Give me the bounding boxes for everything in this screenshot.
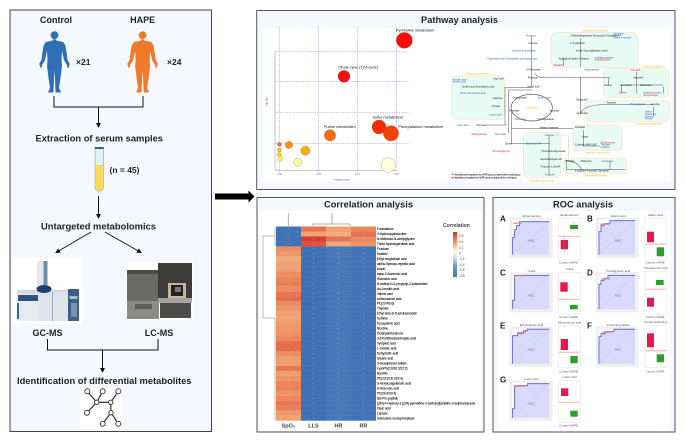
- chart: metabolic pathway map: Hypoxanthine: [584, 68, 600, 71]
- metabolite row labels: Ambroxanoic acid: [377, 297, 402, 301]
- chart: metabolic pathway map: Deoxyuridine: [643, 94, 658, 97]
- chart: metabolic pathway map: 3-PGlycerate: [526, 69, 541, 72]
- chart group F: F: [587, 322, 592, 330]
- legend: correlation scale: -0.6: [459, 268, 465, 272]
- metabolite row labels: 3-Hexylphenol sulfate: [377, 361, 407, 366]
- chart: metabolic pathway map: Glutamine: [577, 112, 589, 115]
- metabolite row labels: Formaldone: [377, 227, 394, 231]
- chart: metabolic pathway map: Linoleic acid Arachidonic acid: [462, 85, 495, 88]
- chart group C: Uracil: [566, 267, 574, 271]
- chart: metabolic pathway map: Carnitine: [493, 97, 503, 100]
- chart group G: Control: [559, 424, 569, 428]
- chart group G: [500, 375, 581, 428]
- pathway legend: [451, 172, 522, 180]
- chart group E: E: [500, 322, 506, 330]
- chart group C: C: [500, 268, 506, 278]
- metabolite row labels: Lactose: [377, 411, 388, 415]
- pathway connections: [487, 37, 663, 175]
- metabolite row labels: [377, 227, 475, 420]
- chart: metabolic pathway map: Thymine: [601, 144, 611, 147]
- chart group E: Ethylmalonic acid: [520, 323, 544, 327]
- heading: untargeted metabolomics: Untargeted metabolomics: [41, 222, 156, 232]
- chart: pathway bubble plot: 0.10: [355, 174, 360, 176]
- chart: metabolic pathway map: Acyl-CoA: [493, 77, 504, 80]
- chart group E: [500, 320, 582, 374]
- label: LC-MS: LC-MS: [145, 328, 173, 338]
- chart: metabolic pathway map: Fatty acid metabolism: [466, 72, 490, 75]
- metabolite row labels: 3-Hexylcoagulanolic acid: [377, 381, 411, 385]
- chart: metabolic pathway map: Urocanate: [602, 160, 614, 163]
- chart: metabolic pathway map: Succinate: [495, 133, 507, 136]
- legend: correlation scale: 0.4: [459, 240, 464, 244]
- arrow: instruments merge to identification: [48, 339, 158, 372]
- text: control count: ×21: [76, 57, 91, 67]
- chart group E: AUC: [528, 348, 535, 352]
- legend: correlation scale: 0.6: [459, 234, 464, 238]
- heading: pathway analysis: Pathway analysis: [421, 15, 498, 26]
- chart: metabolic pathway map: TCA cycle: [526, 107, 538, 110]
- chart group B: AUC: [615, 239, 622, 243]
- chart group A: AUC: [528, 239, 535, 243]
- chart: metabolic pathway map: Acetyl-CoA: [527, 85, 540, 88]
- chart: metabolic pathway map: Indole-3-acetaldehyde oxime: [576, 50, 609, 53]
- chart: metabolic pathway map: Serine: [505, 142, 513, 145]
- chart: metabolic pathway map: Malate Aspartate: [540, 127, 559, 130]
- text: sample size: (n = 45): [110, 165, 140, 175]
- metabolite row labels: PC(20:4/20:4): [377, 391, 396, 395]
- metabolite row labels: Adenosine monophosphate: [377, 416, 415, 420]
- panel: correlation analysis: [257, 198, 484, 432]
- chart: pathway bubble plot: Pathway impact: [334, 178, 350, 181]
- chart group G: Lactic acid: [524, 377, 539, 381]
- metabolite labels: Fructose: [526, 35, 536, 38]
- chart group G: Lactic acid: [562, 375, 577, 379]
- chart: metabolic pathway map: Guanine Uridine: [643, 92, 662, 95]
- chart group A: HAPE: [570, 260, 578, 264]
- chart: metabolic pathway map: Uracil: [582, 135, 588, 138]
- chart group B: Valeric acid: [610, 214, 626, 218]
- pathway group boxes: [452, 32, 670, 177]
- chart group G: HAPE: [570, 424, 578, 428]
- legend: correlation scale: 0.2: [459, 246, 464, 250]
- legend: correlation scale: -0.2: [459, 257, 465, 261]
- metabolite row labels: trans-2-Nonenoic acid: [377, 272, 407, 276]
- chart: metabolic pathway map: Fumarate: [509, 110, 520, 113]
- metabolite row labels: cis-Aconitic acid: [377, 287, 399, 291]
- heatmap column labels: SpO₂: [282, 424, 296, 430]
- chart: metabolic pathway map: Histamine: [581, 160, 592, 163]
- arrow: to GC-MS: [56, 232, 91, 252]
- chart: metabolic pathway map: Serotonin: [613, 32, 625, 35]
- icon: LC-MS instrument: [126, 262, 193, 320]
- chart: pathway bubble plot: Phenylalanine metabolism: [398, 125, 443, 129]
- pathway legend: Metabolites up-regulated in the HAPE group compared with the control group: [454, 177, 518, 180]
- arrow: workflow to analyses: [215, 190, 254, 202]
- chart group A: Ethanolamine: [522, 214, 541, 218]
- chart group E: Control: [559, 370, 569, 374]
- chart: pathway bubble plot: 0.05: [316, 174, 322, 176]
- chart group C: Uracil: [528, 269, 536, 273]
- chart group G: AUC: [528, 402, 535, 406]
- metabolite row labels: Fructose: [377, 247, 389, 251]
- metabolite row labels: Octahydrofuranone: [377, 332, 404, 336]
- chart: pathway bubble plot: 0.15: [394, 174, 400, 176]
- chart: metabolic pathway map: Glucose-6-phosphate: [512, 50, 536, 53]
- chart: metabolic pathway map: Tyrosine: [607, 101, 617, 104]
- chart: metabolic pathway map: Indole-3-acetate: [613, 37, 632, 40]
- chart group D: Control: [646, 315, 656, 319]
- metabolite row labels: L-Tartaric acid: [377, 347, 397, 351]
- metabolite row labels: 4-Hydroxyquinazoline: [377, 232, 407, 236]
- chart: top dendrogram: [288, 213, 350, 226]
- chart: metabolic pathway map: Melatonin: [553, 64, 565, 67]
- legend: correlation scale: [443, 223, 470, 278]
- chart: metabolic pathway map: Pyrimidine metabolism: [585, 151, 610, 154]
- heading: correlation analysis: Correlation analysis: [324, 200, 413, 210]
- chart group F: HAPE: [656, 370, 665, 374]
- heading: extraction of serum samples: Extraction of serum samples: [36, 134, 163, 144]
- chart: metabolic pathway map: N-Methyltryptamine Kynurenine Tryptamine: [571, 34, 619, 37]
- chart: metabolic pathway map: Glucose: [545, 134, 555, 137]
- chart: metabolic pathway map: Fructose-1,6-bisP: [541, 166, 561, 169]
- chart group C: [500, 267, 581, 319]
- chart: metabolic pathway map: Alanine: [645, 115, 654, 118]
- chart group A: [500, 213, 581, 264]
- chart: metabolic pathway map: [451, 30, 670, 182]
- metabolite row labels: Brevifin: [377, 371, 388, 375]
- chart: metabolic pathway map: Glucose: [528, 42, 538, 45]
- metabolite row labels: Tyropinic acid: [377, 342, 396, 346]
- chart group B: [587, 213, 667, 264]
- chart group F: [587, 320, 668, 374]
- chart: metabolic pathway map: Valine: [645, 111, 652, 114]
- chart: metabolic pathway map: Amino acid metabolism: [636, 122, 662, 125]
- legend: correlation scale: Correlation: [443, 223, 470, 229]
- chart: metabolic pathway map: Xanthine: [633, 76, 644, 79]
- chart: metabolic pathway map: Dihydrouracil: [601, 141, 616, 144]
- chart: metabolic pathway map: Glyceraldehyde-3-phosphate dehydrogenase: [487, 57, 538, 60]
- panel: study workflow: [10, 10, 212, 432]
- heatmap column labels: LLS: [308, 424, 319, 430]
- chart group D: AUC: [615, 293, 622, 297]
- chart: metabolic pathway map: Cytosine UMP UDP: [575, 144, 597, 147]
- chart: metabolic pathway map: Phosphoenolpyruvate: [542, 150, 566, 153]
- chart: metabolic pathway map: Inosine: [604, 84, 613, 87]
- legend: correlation scale: -0.8: [459, 274, 465, 278]
- chart group F: Cinnamoylcholine: [644, 320, 668, 324]
- icon: HAPE human figure: [128, 32, 157, 92]
- chart: metabolic pathway map: Glyceraldehyde-3-P: [540, 158, 562, 161]
- chart: metabolic pathway map: Stearic acid: [453, 81, 466, 84]
- chart: metabolic pathway map: Cytidine: [601, 146, 610, 149]
- chart: metabolic pathway map: Pyruvate: [545, 174, 555, 177]
- panel: pathway analysis: [257, 10, 675, 190]
- metabolite row labels: Uracil: [377, 267, 385, 271]
- chart: metabolic pathway map: Indoleacrylate: [595, 59, 611, 62]
- chart: metabolic pathway map: Tryptophol Indole-3-ethanol: [558, 57, 589, 60]
- heatmap column labels: RR: [360, 424, 367, 430]
- chart group E: HAPE: [570, 370, 578, 374]
- chart: pathway bubble plot: Pyrimidine metabolism: [396, 29, 435, 33]
- chart: metabolic pathway map: Phenylalanine: [630, 103, 646, 106]
- metabolite row labels: 8-Hexenoic acid: [377, 386, 399, 390]
- chart: metabolic pathway map: 5-HIAA: [613, 34, 622, 37]
- arrow: tube to metabolomics: [98, 196, 100, 218]
- chart group D: D: [587, 268, 593, 278]
- metabolite row labels: Three-hydroxypicolinic acid: [377, 242, 415, 246]
- metabolite row labels: Sorbitol: [377, 317, 388, 321]
- metabolite row labels: N-Methanol-N-acetylglycine: [377, 237, 415, 241]
- chart: pathway bubble plot: 0.00: [277, 174, 283, 176]
- chart: left dendrogram: [263, 228, 275, 420]
- metabolite row labels: Dehydrofic acid: [377, 352, 399, 356]
- metabolite row labels: Valeric acid: [377, 292, 393, 296]
- chart group G: G: [500, 376, 506, 384]
- metabolite row labels: alpha-Hydroxy-myristic acid: [377, 262, 415, 266]
- metabolite row labels: PE(20:3/18:1/22:4): [377, 376, 403, 380]
- legend: correlation scale: 0: [459, 252, 461, 256]
- metabolite row labels: LysoPE(0:0/16:2/22:2): [377, 366, 408, 370]
- text: HAPE count: ×24: [167, 57, 182, 67]
- chart: metabolic pathway map: Palmitic acid: [453, 78, 467, 81]
- metabolite row labels: Decapalmic acid: [377, 322, 400, 326]
- icon: metabolite network: [80, 388, 123, 429]
- metabolite row labels: Nicotine: [377, 327, 388, 331]
- pathway legend: Metabolites down-regulated in the HAPE group compared with the control group: [454, 173, 521, 176]
- heading: ROC analysis: ROC analysis: [553, 200, 613, 210]
- chart group B: Valeric acid: [648, 213, 663, 217]
- chart group D: [587, 266, 668, 319]
- chart: metabolic pathway map: Glutamate: [576, 99, 588, 102]
- chart: pathway bubble plot: Sulfur metabolism: [372, 115, 403, 119]
- chart: metabolic pathway map: Guanosine: [640, 84, 653, 87]
- chart: metabolic pathway map: Methylglyoxal: [472, 133, 487, 136]
- chart: metabolic pathway map: Oxaloacetate: [512, 97, 528, 100]
- metabolite row labels: Sorbitol: [377, 252, 388, 256]
- metabolite row labels: N-methyl-N-2-propynyl-2-indanamine: [377, 282, 428, 286]
- chart: metabolic pathway map: Glycerate-3-P: [526, 142, 542, 145]
- metabolite row labels: PE(20:4/0:0): [377, 302, 394, 306]
- chart group D: HAPE: [656, 315, 665, 319]
- chart: metabolic pathway map: Proline: [645, 118, 653, 121]
- chart group F: AUC: [615, 348, 622, 352]
- chart: metabolic pathway map: Dimethylglycine: [492, 150, 510, 153]
- heatmap column labels: HR: [335, 424, 342, 430]
- chart: metabolic pathway map: Histidine: [565, 160, 575, 163]
- metabolite row labels: Stearic acid: [377, 356, 393, 361]
- label: GC-MS: GC-MS: [32, 328, 62, 338]
- chart group C: HAPE: [570, 315, 578, 319]
- metabolite row labels: 3,5-Pyridinedicarboxylic acid: [377, 337, 416, 341]
- chart: pathway bubble plot: [267, 27, 443, 181]
- chart: metabolic pathway map: Adenosine: [620, 84, 632, 87]
- chart: metabolic pathway map: Histidine metabolism: [584, 174, 607, 177]
- chart group B: Control: [646, 260, 656, 264]
- chart group C: AUC: [528, 293, 535, 297]
- chart: metabolic pathway map: Isocitrate: [549, 110, 560, 113]
- chart: metabolic pathway map: Adenine: [618, 92, 628, 95]
- chart group F: Control: [646, 370, 656, 374]
- chart: metabolic pathway map: Lactic acid: [457, 124, 469, 127]
- icon: GC-MS instrument: [13, 258, 82, 324]
- chart group A: Control: [559, 260, 569, 264]
- heading: Control group: Control: [40, 15, 72, 25]
- chart: metabolic pathway map: Oleic acid Myristic acid: [460, 92, 486, 95]
- metabolite row labels: Ethyl beta-D-fructofuranoside: [377, 312, 417, 316]
- chart: metabolic pathway map: Acetate: [492, 105, 501, 108]
- heading: identification of differential metabolites: Identification of differential metabolites: [17, 376, 192, 386]
- chart: metabolic pathway map: Imidazole-4-acetate Carnosine: [575, 169, 609, 172]
- metabolite row labels: Bis-Pro-peptide: [377, 396, 399, 400]
- chart group B: HAPE: [656, 260, 665, 264]
- chart: metabolic pathway map: Orotidine: [575, 126, 586, 129]
- heading: HAPE group: HAPE: [130, 15, 155, 25]
- metabolite row labels: Thymine: [377, 307, 389, 311]
- icon: serum tube: [95, 147, 104, 191]
- chart group A: Ethanolamine: [560, 213, 579, 217]
- icon: control human figure: [40, 32, 69, 92]
- arrow: groups merge to extraction: [54, 96, 143, 127]
- chart group D: Thiodiglycolic acid: [606, 269, 630, 273]
- chart group C: Control: [559, 315, 569, 319]
- chart group B: B: [587, 214, 593, 224]
- heatmap column labels: [282, 424, 367, 430]
- metabolite row labels: Ricinoleic acid: [377, 277, 397, 281]
- chart: metabolic pathway map: Pyruvate: [477, 124, 487, 127]
- metabolite row labels: Oleic acid: [377, 406, 391, 410]
- chart: metabolic pathway map: Succinate: [515, 118, 527, 121]
- arrow: to LC-MS: [105, 232, 141, 252]
- chart: metabolic pathway map: Purine metabolism: [644, 66, 664, 69]
- chart: metabolic pathway map: Glycolysis metabolism: [529, 179, 554, 182]
- chart group E: Ethylmalonic acid: [558, 320, 582, 324]
- chart: metabolic pathway map: Citrate cycle: [537, 97, 552, 100]
- chart group F: Cinnamoylcholine: [606, 323, 630, 327]
- chart: metabolic pathway map: Leucine: [651, 103, 660, 106]
- chart: metabolic pathway map: Indolepropionate: [595, 56, 614, 59]
- chart: metabolic pathway map: Uric acid: [630, 69, 641, 72]
- panel: ROC analysis: [493, 198, 675, 432]
- legend: correlation scale: -0.4: [459, 263, 465, 267]
- chart group D: Thiodiglycolic acid: [643, 266, 668, 270]
- chart: pathway bubble plot: Citrate cycle (TCA cycle): [338, 66, 378, 70]
- chart group A: A: [500, 214, 506, 224]
- chart: metabolic pathway map: L-Tryptophan: [570, 42, 585, 45]
- chart: metabolic pathway map: Pyruvate: [528, 77, 538, 80]
- chart: metabolic pathway map: Lauric acid: [489, 114, 502, 117]
- metabolite row labels: [(2R)-4-Hydroxy-1-[(2R)-pyrrolidine-2-carbonyl]amidine-2-sulphonyl]-acid: [377, 401, 475, 405]
- chart: metabolic pathway map: Isoleucine: [645, 113, 657, 116]
- pathway titles: Tryptophan metabolism: [582, 30, 608, 33]
- chart: pathway bubble plot: Purine metabolism: [324, 125, 356, 129]
- chart: pathway bubble plot: -log10(p): [267, 97, 269, 107]
- chart: correlation heatmap: [276, 226, 376, 421]
- chart: metabolic pathway map: 2-Oxoglutarate: [537, 118, 554, 121]
- metabolite row labels: Ethyl-megluteate acid: [377, 257, 407, 261]
